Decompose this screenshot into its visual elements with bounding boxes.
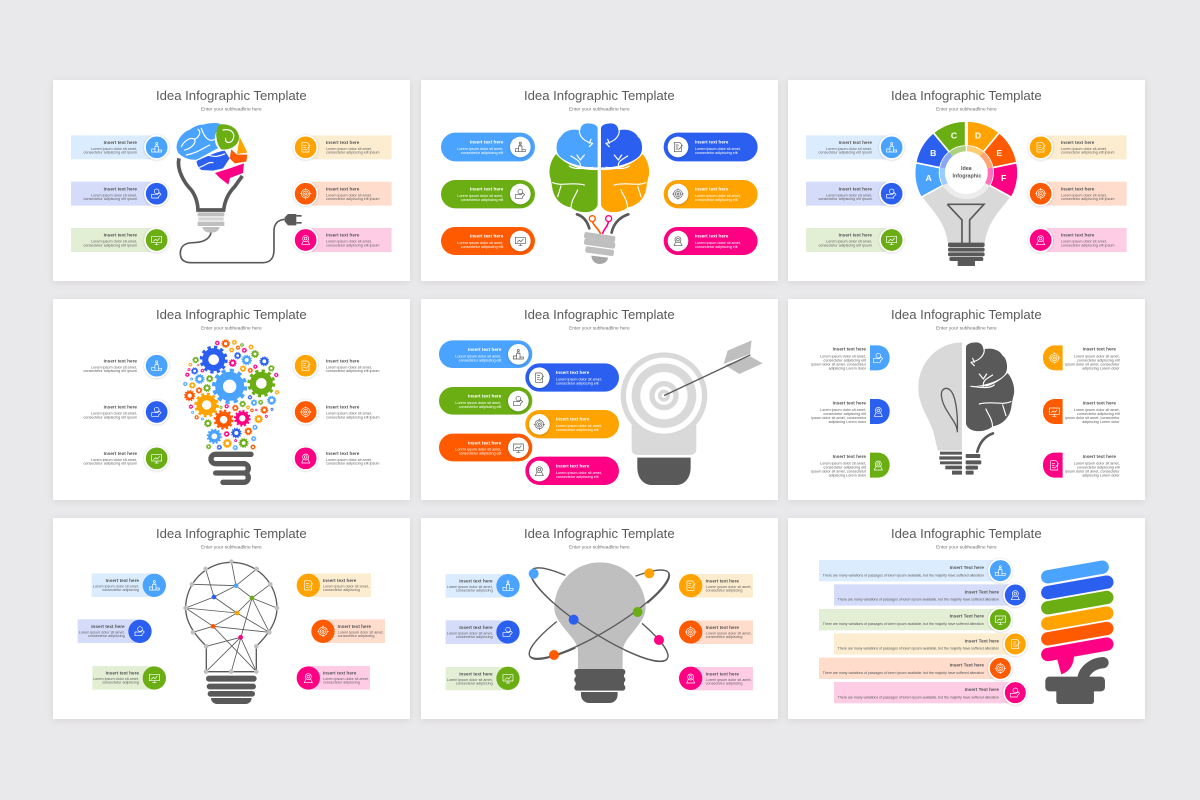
card: left 3 — [806, 228, 903, 252]
pill: left 2: Insert text here — [468, 394, 502, 399]
four-colour brain — [549, 123, 649, 212]
row 6: Insert Text here — [965, 687, 999, 692]
pill: right 2: Insert text here — [695, 187, 729, 192]
row 2: Insert Text here — [965, 589, 999, 594]
item: right 1 — [294, 354, 380, 377]
pill: right 3: Insert text here — [695, 234, 729, 239]
panel: segmented wheel bulb — [788, 80, 1145, 281]
panel: light bulb with brain and plug — [53, 80, 410, 281]
card: left 1: consectetur adipiscing — [102, 588, 139, 592]
card: right 1: consectetur adipiscing — [323, 588, 360, 592]
subtitle: Enter your subheadline here — [569, 326, 630, 332]
title: Idea Infographic Template — [156, 307, 307, 322]
card: left 1 — [446, 574, 520, 598]
pill: left 1: Lorem ipsum dolor sit amet, — [455, 354, 501, 358]
card: right 3: Lorem ipsum dolor sit amet, — [706, 678, 752, 682]
item: left 2: adipiscing Lorem dolor — [829, 420, 867, 424]
lighter ring under wheel — [943, 183, 990, 199]
item: right 3: adipiscing Lorem dolor — [1082, 474, 1120, 478]
item: right 2: Lorem ipsum dolor sit amet, — [326, 412, 372, 416]
pill: left 2: Lorem ipsum dolor sit amet, — [455, 401, 501, 405]
pill: left 3: Lorem ipsum dolor sit amet, — [457, 241, 503, 245]
pill: left 1: Insert text here — [470, 140, 504, 145]
item: right 1: consectetur adipiscing elit — [1077, 358, 1120, 362]
card: left 3: consectetur adipiscing elit ipsum — [83, 243, 137, 247]
grey bulb — [553, 561, 647, 671]
item: left 3: consectetur adipiscing elit ipsum — [83, 462, 137, 466]
card: left 3 — [71, 228, 168, 252]
pill: right 3: Lorem ipsum dolor sit amet, — [556, 471, 602, 475]
subtitle: Enter your subheadline here — [936, 107, 997, 113]
bulb base — [198, 212, 224, 233]
pill: left 3: Lorem ipsum dolor sit amet, — [455, 448, 501, 452]
wire bulb outline — [186, 562, 277, 672]
item: right 1: Insert text here — [326, 358, 360, 363]
card: right 3: consectetur adipiscing elit ipsum — [1061, 243, 1115, 247]
card: right 1: Lorem ipsum dolor sit amet, — [1061, 147, 1107, 151]
pill: right 3: Lorem ipsum dolor sit amet, — [695, 241, 741, 245]
card: left 3: Lorem ipsum dolor sit amet, — [91, 240, 137, 244]
row 2 — [834, 584, 1027, 606]
item: left 1: Insert text here — [104, 358, 137, 363]
card: left 3: Lorem ipsum dolor sit amet, — [93, 677, 139, 681]
panel: four-colour brain bulb with pills — [421, 80, 778, 281]
panel: target bulb with arrow — [421, 299, 778, 500]
pill: right 3 — [525, 457, 619, 485]
card: left 1: consectetur adipiscing — [456, 589, 493, 593]
pill: right 3: consectetur adipiscing elit — [695, 245, 738, 249]
item: right 3: Lorem ipsum dolor sit amet, — [326, 458, 372, 462]
item: left 1 — [83, 354, 168, 377]
pill: right 1: Insert text here — [556, 370, 590, 375]
card: right 2: Insert text here — [338, 624, 371, 629]
item: right 3 — [294, 447, 380, 470]
card: right 1: Insert text here — [1061, 140, 1095, 145]
item: left 1: ipsum dolor sit amet, consectetur — [811, 362, 867, 366]
card: left 3: Insert text here — [839, 233, 872, 238]
item: left 1: Insert text here — [833, 347, 866, 352]
pill: right 2 — [525, 410, 619, 438]
pill: right 3: consectetur adipiscing elit — [556, 475, 599, 479]
title: Idea Infographic Template — [524, 307, 675, 322]
gears forming bulb — [183, 340, 279, 450]
card: right 3 — [679, 667, 753, 690]
pill: left 2: Lorem ipsum dolor sit amet, — [457, 194, 503, 198]
item: right 1: adipiscing Lorem dolor — [1082, 366, 1120, 370]
filament — [947, 204, 984, 243]
item: left 1 — [811, 345, 890, 370]
colourful brain — [177, 123, 247, 185]
card: right 1: consectetur adipiscing elit ipsum — [1061, 151, 1115, 155]
item: left 2: Insert text here — [833, 400, 866, 405]
card: left 2 — [78, 619, 152, 643]
card: right 1 — [297, 573, 371, 597]
pill: right 2: Lorem ipsum dolor sit amet, — [556, 424, 602, 428]
card: right 1: Insert text here — [706, 579, 739, 584]
item: left 2: Lorem ipsum dolor sit amet, — [820, 408, 866, 412]
card: right 1 — [294, 135, 392, 159]
card: left 1: Insert text here — [839, 140, 872, 145]
orbits behind bulb — [520, 555, 678, 674]
pill: right 2: Lorem ipsum dolor sit amet, — [695, 194, 741, 198]
item: left 3: consectetur adipiscing elit — [823, 466, 866, 470]
card: left 3: consectetur adipiscing elit ipsum — [818, 243, 872, 247]
card: right 1: Lorem ipsum dolor sit amet, — [706, 585, 752, 589]
panel: gears bulb — [53, 299, 410, 500]
bulb base — [584, 232, 616, 264]
card: right 3 — [294, 228, 392, 252]
card: left 2: Lorem ipsum dolor sit amet, — [79, 630, 125, 634]
pill: right 1 — [664, 133, 758, 161]
card: right 1: Lorem ipsum dolor sit amet, — [326, 147, 372, 151]
card: left 2: Lorem ipsum dolor sit amet, — [91, 193, 137, 197]
card: right 2: Insert text here — [326, 186, 360, 191]
item: right 2 — [294, 400, 380, 424]
card: right 2 — [1029, 182, 1127, 206]
pill: left 3: Insert text here — [470, 234, 504, 239]
pill: left 3: consectetur adipiscing elit — [459, 452, 501, 456]
pill: right 3 — [664, 227, 758, 255]
item: left 3 — [811, 453, 890, 478]
card: right 3: Insert text here — [1061, 233, 1095, 238]
segment letters: B — [930, 148, 936, 158]
card: right 2: Lorem ipsum dolor sit amet, — [706, 631, 752, 635]
item: left 2: consectetur adipiscing elit — [823, 412, 866, 416]
card: right 2: Insert text here — [706, 625, 739, 630]
card: right 2: consectetur adipiscing — [706, 635, 742, 639]
title: Idea Infographic Template — [156, 526, 307, 541]
item: left 3 — [83, 447, 168, 470]
pill: right 1: Lorem ipsum dolor sit amet, — [695, 147, 741, 151]
pill: left 1 — [439, 340, 533, 368]
card: right 2: Lorem ipsum dolor sit amet, — [326, 193, 372, 197]
pill: left 1 — [441, 133, 535, 161]
item: right 2: consectetur adipiscing elit ipsum — [326, 415, 380, 419]
subtitle: Enter your subheadline here — [569, 107, 630, 113]
card: left 3: consectetur adipiscing — [456, 682, 493, 686]
item: left 3: adipiscing Lorem dolor — [829, 474, 867, 478]
subtitle: Enter your subheadline here — [936, 326, 997, 332]
card: right 1 — [679, 574, 753, 598]
card: left 3: Insert text here — [106, 671, 139, 676]
network nodes — [183, 559, 279, 674]
card: left 1 — [806, 135, 903, 159]
card: right 2: Insert text here — [1061, 186, 1095, 191]
pill: right 1: consectetur adipiscing elit — [556, 381, 599, 385]
card: left 2: Insert text here — [839, 186, 872, 191]
bulb outline — [178, 158, 242, 210]
title: Idea Infographic Template — [891, 307, 1042, 322]
winding base — [211, 454, 251, 482]
item: right 2 — [1043, 399, 1120, 424]
card: left 2: Insert text here — [91, 624, 125, 629]
card: left 1: Insert text here — [104, 140, 137, 145]
row 4 — [834, 633, 1027, 655]
bulb base — [637, 458, 691, 485]
pill: right 2: consectetur adipiscing elit — [556, 428, 599, 432]
card: right 3: Insert text here — [323, 671, 357, 676]
item: left 2: Insert text here — [104, 405, 137, 410]
item: right 1: Lorem ipsum dolor sit amet, — [1074, 354, 1120, 358]
pill: left 3: Insert text here — [468, 440, 502, 445]
card: left 3: Insert text here — [459, 672, 493, 677]
card: right 3: Insert text here — [326, 233, 360, 238]
card: left 1: consectetur adipiscing elit ipsum — [83, 151, 137, 155]
item: right 3 — [1043, 453, 1120, 478]
card: right 1 — [1029, 135, 1127, 159]
segment letters: C — [951, 130, 958, 140]
pill: right 2 — [664, 180, 758, 208]
item: left 2: consectetur adipiscing elit ipsum — [83, 415, 137, 419]
card: left 2: consectetur adipiscing elit ipsum — [818, 197, 872, 201]
pill: left 1: consectetur adipiscing elit — [459, 358, 501, 362]
pill: right 2: consectetur adipiscing elit — [695, 198, 738, 202]
title: Idea Infographic Template — [524, 88, 675, 103]
card: right 2: Lorem ipsum dolor sit amet, — [338, 630, 384, 634]
screw base — [948, 243, 985, 266]
pill: left 3 — [439, 433, 533, 462]
centre label: Idea — [961, 166, 972, 172]
centre label: Infographic — [952, 173, 982, 179]
pill: left 2: consectetur adipiscing elit — [459, 405, 501, 409]
item: right 3: Insert text here — [1083, 454, 1116, 459]
card: left 3 — [446, 667, 520, 690]
half base — [939, 452, 981, 475]
item: left 2: ipsum dolor sit amet, consectetur — [811, 416, 867, 420]
panel: atom orbit bulb — [421, 518, 778, 719]
row 3: There are many variations of passages of lorem ipsum available, but the majority have suffered alteration — [823, 622, 984, 626]
card: left 1: Lorem ipsum dolor sit amet, — [826, 147, 872, 151]
title: Idea Infographic Template — [891, 526, 1042, 541]
card: left 2: consectetur adipiscing — [456, 635, 493, 639]
item: left 1: consectetur adipiscing elit — [823, 358, 866, 362]
item: left 3: Lorem ipsum dolor sit amet, — [820, 462, 866, 466]
pill: left 1: Insert text here — [468, 347, 502, 352]
row 2: There are many variations of passages of lorem ipsum available, but the majority have suffered alteration — [838, 598, 999, 602]
subtitle: Enter your subheadline here — [936, 545, 997, 551]
card: right 3: consectetur adipiscing elit ipsum — [326, 243, 380, 247]
card: left 2: Insert text here — [104, 186, 137, 191]
wheel inner tints — [940, 146, 993, 185]
bulb base — [206, 676, 257, 704]
subtitle: Enter your subheadline here — [201, 326, 262, 332]
item: left 2: Lorem ipsum dolor sit amet, — [91, 412, 137, 416]
item: right 2: adipiscing Lorem dolor — [1082, 420, 1120, 424]
item: right 2: consectetur adipiscing elit — [1077, 412, 1120, 416]
item: left 3: ipsum dolor sit amet, consectetur — [811, 470, 867, 474]
item: right 1: consectetur adipiscing elit ipsum — [326, 369, 380, 373]
filament loop — [941, 388, 957, 432]
card: left 2 — [806, 182, 903, 206]
item: right 3: consectetur adipiscing elit — [1077, 466, 1120, 470]
card: right 3: consectetur adipiscing — [706, 682, 742, 686]
item: left 1: Lorem ipsum dolor sit amet, — [91, 365, 137, 369]
card: right 3: Lorem ipsum dolor sit amet, — [326, 240, 372, 244]
pill: right 1: Lorem ipsum dolor sit amet, — [556, 377, 602, 381]
card: right 2: Lorem ipsum dolor sit amet, — [1061, 193, 1107, 197]
card: right 1: consectetur adipiscing elit ipsum — [326, 151, 380, 155]
pill: right 3: Insert text here — [556, 464, 590, 469]
segment letters: E — [996, 148, 1002, 158]
row 1: Insert Text here — [950, 565, 984, 570]
item: left 3: Insert text here — [104, 451, 137, 456]
pill: left 2 — [439, 387, 533, 415]
card: left 2: Lorem ipsum dolor sit amet, — [447, 631, 493, 635]
panel: half bulb half brain — [788, 299, 1145, 500]
item: right 2: Lorem ipsum dolor sit amet, — [1074, 408, 1120, 412]
pill: left 1: Lorem ipsum dolor sit amet, — [457, 147, 503, 151]
cord and plug — [180, 214, 302, 263]
filament arcs — [577, 214, 628, 233]
arrow — [664, 340, 763, 396]
row 4: Insert Text here — [965, 638, 999, 643]
card: left 1 — [92, 573, 166, 597]
pill: right 2: Insert text here — [556, 417, 590, 422]
card: right 3 — [1029, 228, 1127, 252]
item: right 3: consectetur adipiscing elit ipsum — [326, 462, 380, 466]
item: left 1: Lorem ipsum dolor sit amet, — [820, 354, 866, 358]
row 3: Insert Text here — [950, 614, 984, 619]
subtitle: Enter your subheadline here — [201, 545, 262, 551]
item: left 1: adipiscing Lorem dolor — [829, 366, 867, 370]
pill: right 1: consectetur adipiscing elit — [695, 151, 738, 155]
row 5: There are many variations of passages of lorem ipsum available, but the majority have suffered alteration — [823, 671, 984, 675]
card: left 2: consectetur adipiscing — [88, 634, 125, 638]
row 1 — [819, 559, 1012, 582]
row 6 — [834, 681, 1027, 704]
segment letters: F — [1001, 173, 1006, 183]
pill: left 3: consectetur adipiscing elit — [461, 245, 503, 249]
card: left 1: Lorem ipsum dolor sit amet, — [91, 147, 137, 151]
item: right 3: Lorem ipsum dolor sit amet, — [1074, 462, 1120, 466]
card: right 1: consectetur adipiscing — [706, 589, 742, 593]
card: right 3: Insert text here — [706, 672, 739, 677]
card: right 2 — [311, 619, 385, 643]
card: left 2: consectetur adipiscing elit ipsum — [83, 197, 137, 201]
card: left 1: Insert text here — [459, 579, 493, 584]
pill: left 2: consectetur adipiscing elit — [461, 198, 503, 202]
title: Idea Infographic Template — [891, 88, 1042, 103]
card: left 3: consectetur adipiscing — [102, 681, 139, 685]
subtitle: Enter your subheadline here — [201, 107, 262, 113]
card: left 1: consectetur adipiscing elit ipsum — [818, 151, 872, 155]
item: left 1: consectetur adipiscing elit ipsum — [83, 369, 137, 373]
row 1: There are many variations of passages of lorem ipsum available, but the majority have suffered alteration — [823, 573, 984, 577]
item: left 2 — [811, 399, 890, 424]
pill: right 1 — [525, 363, 619, 392]
item: right 2: Insert text here — [326, 405, 360, 410]
card: right 3: Lorem ipsum dolor sit amet, — [323, 677, 369, 681]
card: right 1: Insert text here — [326, 140, 360, 145]
card: right 2: consectetur adipiscing elit ipsum — [326, 197, 380, 201]
card: left 1: Lorem ipsum dolor sit amet, — [447, 585, 493, 589]
card: left 1 — [71, 135, 168, 159]
network lines — [186, 561, 277, 672]
card: left 2 — [446, 620, 520, 644]
card: left 1: Lorem ipsum dolor sit amet, — [93, 584, 139, 588]
item: right 2: Insert text here — [1083, 400, 1116, 405]
card: right 2: consectetur adipiscing elit ipsum — [1061, 197, 1115, 201]
row 5 — [819, 657, 1012, 680]
card: right 3: consectetur adipiscing — [323, 681, 360, 685]
target bulb body — [621, 352, 707, 455]
item: right 3: Insert text here — [326, 451, 360, 456]
title: Idea Infographic Template — [524, 526, 675, 541]
card: left 3: Lorem ipsum dolor sit amet, — [826, 240, 872, 244]
pill: left 2 — [441, 180, 535, 208]
spiral bulb — [1040, 559, 1115, 674]
card: right 2: consectetur adipiscing — [338, 634, 374, 638]
pill: left 1: consectetur adipiscing elit — [461, 151, 503, 155]
pill: left 2: Insert text here — [470, 187, 504, 192]
item: left 2 — [83, 400, 168, 424]
card: right 3 — [297, 666, 370, 690]
grey bulb body — [922, 185, 1010, 243]
item: left 3: Lorem ipsum dolor sit amet, — [91, 458, 137, 462]
card: left 3: Insert text here — [104, 233, 137, 238]
segment letters: D — [975, 130, 981, 140]
dark half brain — [966, 342, 1014, 431]
panel: spiral bulb with long rows — [788, 518, 1145, 719]
card: right 1: Lorem ipsum dolor sit amet, — [323, 584, 369, 588]
item: right 1 — [1043, 345, 1120, 370]
row 5: Insert Text here — [950, 662, 984, 667]
pill: right 1: Insert text here — [695, 140, 729, 145]
centre label — [945, 151, 988, 194]
pill: left 3 — [441, 227, 535, 255]
item: right 2: ipsum dolor sit amet, consectetur — [1065, 416, 1120, 420]
card: left 2 — [71, 182, 168, 206]
card: right 1: Insert text here — [323, 578, 357, 583]
card: right 2 — [679, 620, 753, 644]
item: right 3: ipsum dolor sit amet, consectetur — [1065, 470, 1120, 474]
card: left 1: Insert text here — [106, 578, 139, 583]
item: right 1: Lorem ipsum dolor sit amet, — [326, 365, 372, 369]
row 4: There are many variations of passages of lorem ipsum available, but the majority have suffered alteration — [838, 646, 999, 650]
dark base — [1045, 663, 1105, 704]
orbits in front of bulb — [530, 571, 669, 661]
item: left 3: Insert text here — [833, 454, 866, 459]
half bulb — [918, 342, 962, 451]
card: left 2: Lorem ipsum dolor sit amet, — [826, 193, 872, 197]
row 6: There are many variations of passages of lorem ipsum available, but the majority have suffered alteration — [838, 695, 999, 699]
card: left 3 — [92, 666, 166, 690]
orbit dots — [529, 568, 664, 660]
subtitle: Enter your subheadline here — [569, 545, 630, 551]
item: right 1: Insert text here — [1083, 347, 1116, 352]
card: left 3: Lorem ipsum dolor sit amet, — [447, 678, 493, 682]
segment letters: A — [926, 173, 933, 183]
card: right 3: Lorem ipsum dolor sit amet, — [1061, 240, 1107, 244]
screw base — [574, 669, 625, 703]
wheel segments — [915, 121, 1018, 197]
card: right 2 — [294, 182, 392, 206]
arc to base — [977, 433, 993, 452]
card: left 2: Insert text here — [459, 625, 493, 630]
panel: wireframe network bulb — [53, 518, 410, 719]
title: Idea Infographic Template — [156, 88, 307, 103]
item: right 1: ipsum dolor sit amet, consectetur — [1065, 362, 1120, 366]
row 3 — [819, 608, 1012, 631]
